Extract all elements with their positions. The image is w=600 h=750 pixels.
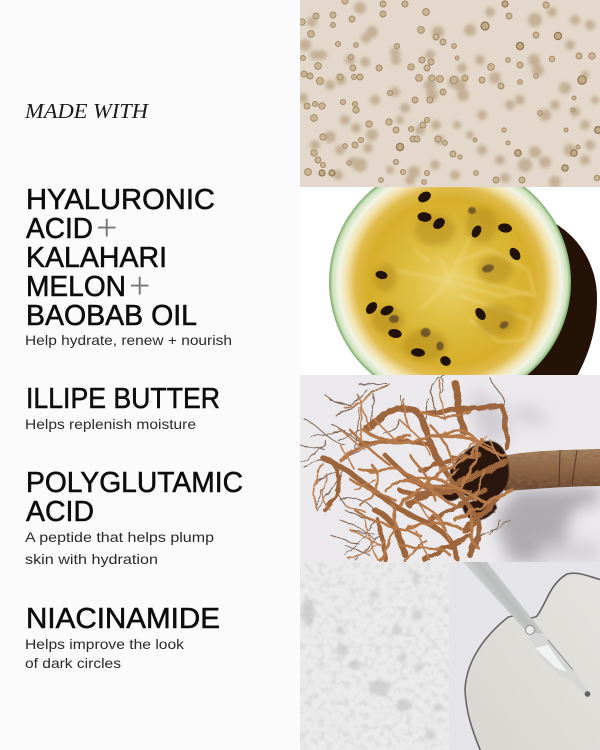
heading: ingredient names: MELON [26, 271, 126, 303]
description [25, 636, 185, 671]
dark root core [440, 441, 509, 520]
root cast shadow [470, 392, 600, 562]
heading: ingredient names: + [129, 265, 150, 307]
foam shaded patches [301, 570, 442, 740]
left text panel background [0, 0, 300, 750]
melon seeds [364, 189, 523, 368]
root stem [504, 449, 600, 491]
thick roots [323, 384, 507, 560]
serum pool [465, 573, 600, 750]
heading: ingredient names: + [96, 207, 117, 249]
melon cast shadow [528, 224, 597, 375]
description: Helps replenish moisture [25, 416, 196, 432]
dropper tube [463, 562, 544, 634]
dropper tip opening [585, 691, 590, 697]
air bubble [526, 626, 534, 634]
ingredient block: polyglutamic acid [25, 467, 243, 567]
ingredient block: illipe butter [25, 383, 220, 432]
ingredient block: hyaluronic acid, kalahari melon, baobab oil [25, 184, 232, 348]
melon flesh and rind [329, 187, 571, 375]
heading: ingredient names: BAOBAB OIL [26, 300, 197, 332]
description: skin with hydration [25, 551, 158, 567]
heading: ingredient names: HYALURONIC [26, 184, 215, 216]
photo panel: serum dropper [449, 562, 600, 750]
foam noise texture [300, 562, 449, 750]
medium roots [340, 412, 512, 561]
photo panel: golden bubbles [298, 0, 600, 188]
eyebrow heading: made with: MADE WITH [24, 99, 150, 123]
melon darker seed-pocket tones [372, 207, 517, 361]
heading: niacinamide: NIACINAMIDE [26, 603, 220, 635]
photo panel: white foam texture [300, 562, 449, 750]
thin grey rootlets [300, 375, 510, 560]
light rootlets [314, 380, 500, 560]
heading: polyglutamic acid: ACID [26, 496, 94, 528]
heading: polyglutamic acid [26, 467, 243, 528]
melon faded seeds [389, 207, 510, 350]
description: of dark circles [25, 655, 121, 671]
photo panel: baobab root [300, 375, 600, 562]
heading: ingredient names: ACID [26, 213, 93, 245]
description [25, 529, 214, 567]
description: Helps improve the look [25, 636, 185, 652]
melon segment patterns [395, 222, 535, 342]
heading: polyglutamic acid: POLYGLUTAMIC [26, 467, 243, 499]
ingredient block: niacinamide [25, 603, 220, 671]
glass dropper [463, 562, 590, 697]
photo panel: halved kalahari melon [329, 187, 597, 375]
description: Help hydrate, renew + nourish [25, 332, 232, 348]
heading: ingredient names [26, 184, 215, 332]
heading: illipe butter: ILLIPE BUTTER [26, 383, 220, 415]
heading: ingredient names: KALAHARI [26, 242, 167, 274]
dropper lower glass [527, 632, 588, 695]
description: A peptide that helps plump [25, 529, 214, 545]
